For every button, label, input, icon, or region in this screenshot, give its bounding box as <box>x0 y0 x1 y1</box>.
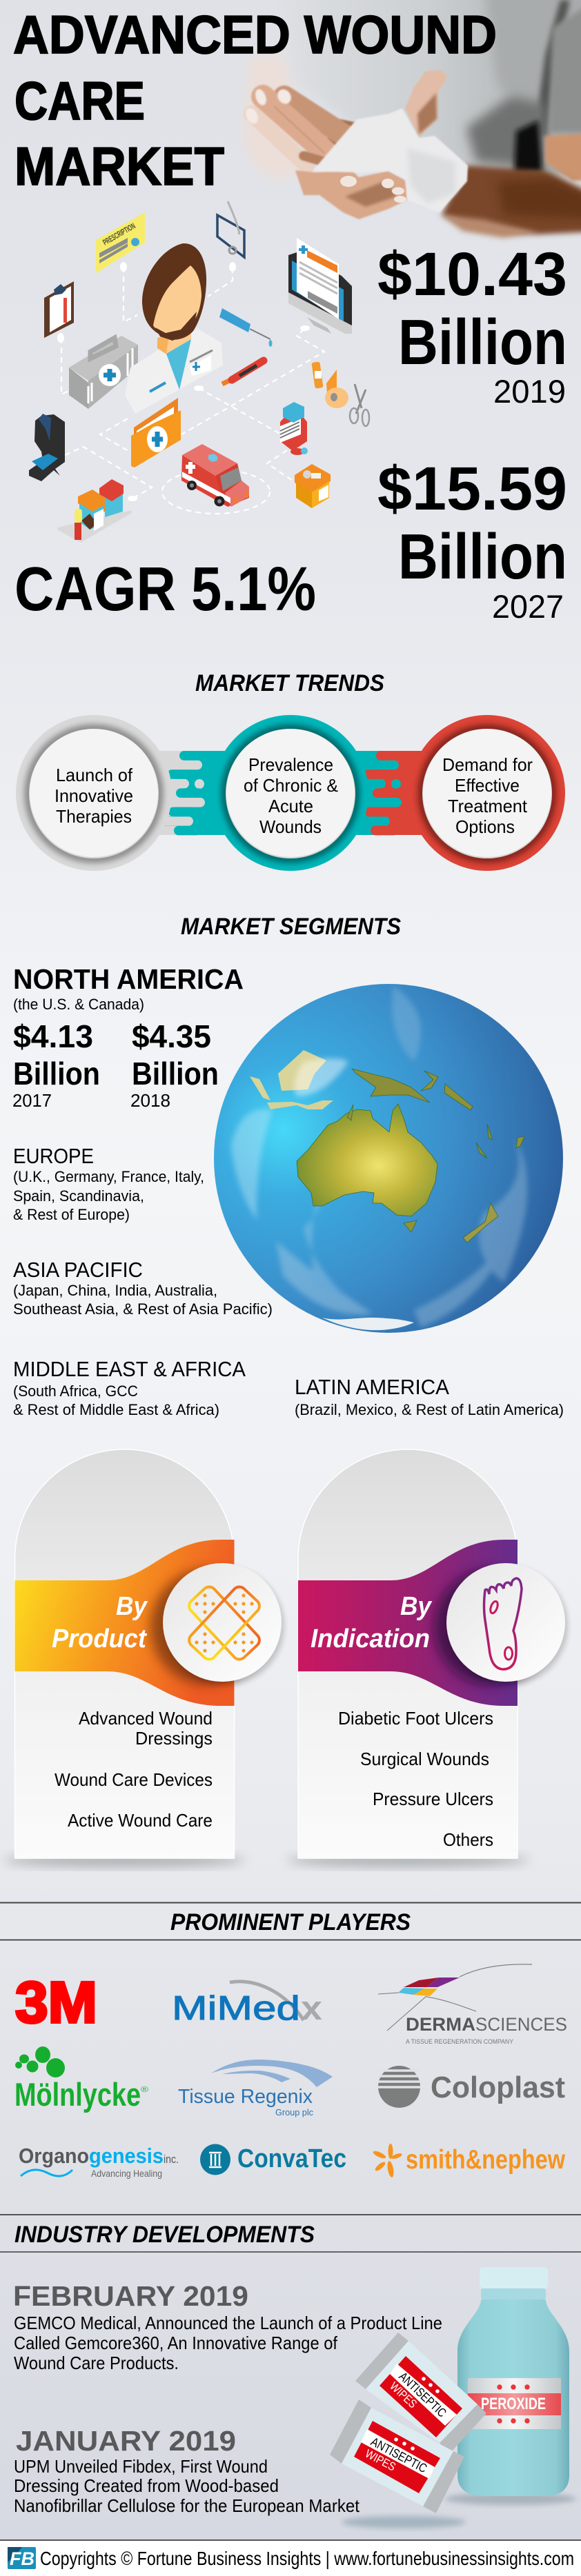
connector: grey to teal <box>148 751 228 835</box>
icon: monitor <box>288 238 352 334</box>
icon: fortune business insights logo: FB <box>10 2548 35 2569</box>
panel: by indication <box>287 1449 568 1867</box>
region: europe: (U.K., Germany, France, Italy, <box>13 1168 204 1185</box>
icon: clipboard <box>44 281 74 338</box>
panel: by product <box>3 1449 284 1867</box>
development: january 2019: UPM Unveiled Fibdex, First Wound <box>14 2456 268 2477</box>
circle: launch of innovative therapies: Therapies <box>56 806 132 827</box>
region: europe: & Rest of Europe) <box>13 1206 130 1223</box>
heading: prominent players: PROMINENT PLAYERS <box>170 1909 411 1935</box>
icon: folder <box>131 398 181 467</box>
list: indications: Others <box>443 1829 493 1850</box>
header photo: bandaged wrist <box>243 0 581 238</box>
logo: Coloplast <box>378 2066 565 2108</box>
region: middle east and africa <box>13 1357 246 1418</box>
region: middle east and africa: (South Africa, GCC <box>13 1382 138 1400</box>
development: january 2019 <box>14 2425 360 2516</box>
logo: Coloplast: Coloplast <box>431 2071 565 2104</box>
list: product types: Advanced Wound <box>79 1708 213 1729</box>
stat: 2019 market size <box>377 239 567 410</box>
wipe packet: lower <box>330 2399 464 2513</box>
icon: first aid case <box>69 336 138 409</box>
icon: bandage, tape and scissors <box>311 361 369 426</box>
hand: thumb <box>405 70 447 137</box>
development: january 2019: Nanofibrillar Cellulose for the European Market <box>14 2495 360 2516</box>
stat: 2027 market size: 2027 <box>492 588 564 625</box>
label: by product: Product <box>52 1624 147 1653</box>
icon: syringe <box>219 308 272 347</box>
circle: demand for effective treatment options: Demand for <box>442 754 533 775</box>
region: latin america: LATIN AMERICA <box>295 1375 449 1399</box>
region: europe: EUROPE <box>13 1144 94 1168</box>
region: europe: Spain, Scandinavia, <box>13 1187 144 1205</box>
label: by product <box>52 1592 148 1653</box>
logo: Smith and Nephew <box>372 2144 566 2178</box>
logo: DermaSciences <box>378 1964 567 2046</box>
logo: Organogenesis <box>19 2144 179 2179</box>
stat: 2018 value: Billion <box>132 1056 219 1091</box>
icon: bottles on tray <box>57 479 132 543</box>
circle: demand for effective treatment options: Treatment <box>448 796 528 816</box>
circle: demand for effective treatment options: Options <box>455 816 515 837</box>
logo: Tissue Regenix <box>178 2060 333 2117</box>
stat: 2019 market size: $10.43 <box>377 239 567 308</box>
logo: ConvaTec <box>200 2144 346 2175</box>
logo: Organogenesis: genesis <box>89 2144 164 2168</box>
stat: 2017 value: $4.13 <box>13 1018 93 1054</box>
list: product types <box>55 1708 213 1831</box>
circle: demand for effective treatment options <box>409 715 565 871</box>
list: product types: Wound Care Devices <box>55 1769 213 1790</box>
logo: MiMedx <box>172 1982 322 2027</box>
label: by indication <box>311 1592 433 1653</box>
region: north america: NORTH AMERICA <box>13 963 244 995</box>
list: indications <box>338 1708 493 1850</box>
title: CARE <box>14 70 145 131</box>
logo: DermaSciences: DERMA <box>406 2014 475 2035</box>
logo: Organogenesis: inc. <box>164 2153 179 2166</box>
circle: prevalence of chronic and acute wounds <box>213 715 368 871</box>
icon: thermometer <box>222 361 264 384</box>
region: latin america: (Brazil, Mexico, & Rest of Latin America) <box>295 1401 564 1418</box>
label: by indication: Indication <box>311 1624 430 1653</box>
medical illustration <box>29 201 369 543</box>
title: MARKET <box>14 136 224 197</box>
wipe packet: lower: WIPES <box>363 2447 398 2474</box>
region: middle east and africa: & Rest of Middle East & Africa) <box>13 1401 219 1418</box>
development: february 2019: FEBRUARY 2019 <box>13 2280 248 2312</box>
circle: prevalence of chronic and acute wounds: Acute <box>268 796 313 816</box>
icon: foot disc <box>446 1563 565 1682</box>
logo: ConvaTec: ConvaTec <box>237 2144 346 2173</box>
continents <box>250 1050 524 1242</box>
development: january 2019: Dressing Created from Wood-based <box>14 2475 279 2496</box>
footer <box>0 2540 581 2576</box>
hand: lower fingers <box>295 170 407 219</box>
wipe packet: upper: ANTISEPTIC <box>396 2369 449 2420</box>
icon: prescription card: PRESCRIPTION <box>101 221 137 248</box>
stat: 2018 value: 2018 <box>130 1090 170 1111</box>
logo: Molnlycke <box>14 2046 148 2113</box>
logo: Molnlycke: Mölnlycke <box>14 2076 141 2113</box>
list: indications: Surgical Wounds <box>360 1749 489 1769</box>
region: north america <box>12 963 244 1111</box>
heading: market segments: MARKET SEGMENTS <box>181 914 401 940</box>
chart: market trends linked circles <box>16 715 565 871</box>
connector: teal to red <box>345 751 424 835</box>
region: asia pacific: ASIA PACIFIC <box>13 1258 143 1282</box>
doctor figure <box>125 243 223 414</box>
region: asia pacific <box>13 1258 273 1318</box>
stat: 2027 market size: $15.59 <box>377 454 567 523</box>
icon: prescription card <box>96 212 145 273</box>
stat: 2018 value: $4.35 <box>132 1018 211 1054</box>
logo: Tissue Regenix: Group plc <box>275 2107 313 2117</box>
stat: 2017 value: 2017 <box>12 1090 52 1111</box>
heading: market trends: MARKET TRENDS <box>195 670 384 696</box>
region: latin america <box>295 1375 564 1418</box>
globe <box>214 984 563 1333</box>
illustration: peroxide bottle: PEROXIDE <box>481 2395 546 2413</box>
circle: launch of innovative therapies: Innovative <box>55 785 133 806</box>
development: february 2019: GEMCO Medical, Announced the Launch of a Product Line <box>14 2313 442 2333</box>
heading: industry developments: INDUSTRY DEVELOPMENTS <box>14 2222 315 2248</box>
list: product types: Active Wound Care <box>68 1810 213 1831</box>
region: asia pacific: Southeast Asia, & Rest of Asia Pacific) <box>13 1300 273 1318</box>
logo: DermaSciences: SCIENCES <box>475 2014 567 2035</box>
logo: 3M: 3M <box>15 1970 97 2035</box>
list: indications: Pressure Ulcers <box>373 1789 493 1809</box>
icon: red medicine bottle <box>280 402 308 455</box>
region: asia pacific: (Japan, China, India, Australia, <box>13 1282 217 1299</box>
wipe packet: upper <box>355 2333 486 2455</box>
hand: fingers <box>244 87 357 165</box>
logo: Tissue Regenix: Tissue Regenix <box>178 2086 313 2108</box>
list: indications: Diabetic Foot Ulcers <box>338 1708 493 1729</box>
logo: DermaSciences: A TISSUE REGENERATION COMPANY <box>406 2038 514 2046</box>
circle: launch of innovative therapies <box>16 715 172 871</box>
region: north america: (the U.S. & Canada) <box>13 996 144 1013</box>
circle: prevalence of chronic and acute wounds: Wounds <box>259 816 322 837</box>
icon: crossed bandages disc <box>163 1563 282 1682</box>
label: by product: By <box>116 1592 148 1621</box>
development: february 2019: Wound Care Products. <box>14 2353 179 2373</box>
circle: prevalence of chronic and acute wounds: of Chronic & <box>244 775 338 796</box>
illustration: peroxide bottle <box>445 2267 576 2505</box>
stat: 2018 value <box>130 1018 219 1111</box>
icon: orange pill box <box>295 464 331 508</box>
stat: 2017 value <box>12 1018 100 1111</box>
logo: MiMedx: MiMed <box>172 1990 300 2027</box>
region: europe <box>13 1144 204 1223</box>
circle: prevalence of chronic and acute wounds: Prevalence <box>248 754 333 775</box>
icon: microscope <box>29 414 65 481</box>
development: february 2019 <box>13 2280 442 2373</box>
icon: ambulance <box>181 444 249 507</box>
logo: MiMedx: x <box>301 1990 322 2027</box>
illustration: antiseptic wipes <box>330 2333 486 2528</box>
stat: CAGR: CAGR 5.1% <box>14 555 316 624</box>
circle: launch of innovative therapies: Launch of <box>56 765 133 785</box>
circle: demand for effective treatment options: Effective <box>455 775 520 796</box>
wipe packet: upper: WIPES <box>387 2379 420 2411</box>
label: by indication: By <box>400 1592 433 1621</box>
list: product types: Dressings <box>135 1728 213 1749</box>
wipe packet: lower: ANTISEPTIC <box>368 2435 429 2475</box>
title: ADVANCED WOUND <box>13 4 497 65</box>
title <box>13 4 497 197</box>
logo: Organogenesis: Organo <box>19 2144 89 2168</box>
stat: 2027 market size <box>377 454 567 625</box>
icon: stethoscope <box>217 201 244 257</box>
logo: Molnlycke: ® <box>141 2086 148 2094</box>
development: february 2019: Called Gemcore360, An Innovative Range of <box>14 2333 338 2353</box>
region: middle east and africa: MIDDLE EAST & AFRICA <box>13 1357 246 1381</box>
logo: Organogenesis: Advancing Healing <box>91 2168 162 2179</box>
stat: 2019 market size: 2019 <box>493 373 566 410</box>
stat: 2017 value: Billion <box>13 1056 100 1091</box>
bandage <box>313 108 468 212</box>
development: january 2019: JANUARY 2019 <box>16 2425 236 2457</box>
